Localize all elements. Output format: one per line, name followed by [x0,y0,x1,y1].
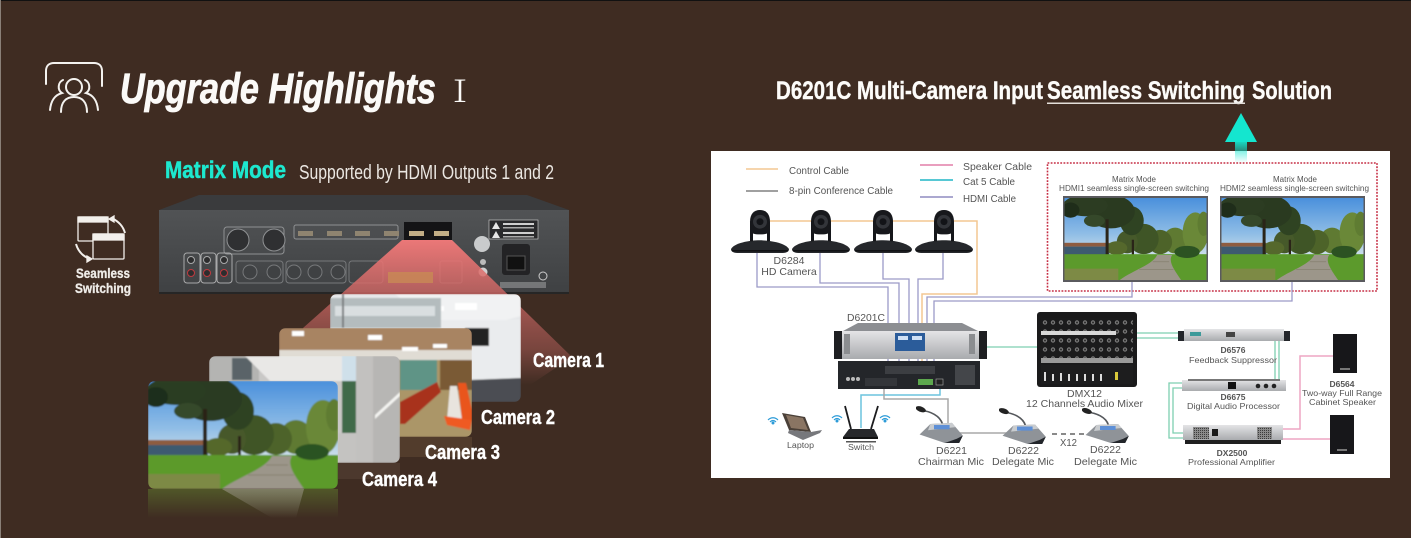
screen 1: HDMI1 seamless single-screen switching [1059,184,1209,193]
label: X12: X12 [1060,438,1077,449]
photo: camera 3 corridor [209,356,400,463]
audio mixer DMX12 [1026,312,1143,410]
RCA connectors [184,253,232,283]
icon: seamless switching [76,216,125,262]
device rear panel [159,195,569,294]
arrow: up to heading [1225,113,1257,163]
subheading: matrix mode [165,157,554,184]
photo: camera 4 park [144,377,342,489]
title: Ⅰ [445,67,475,111]
photo: camera 1 office [330,294,521,402]
laptop [768,413,822,450]
digital audio processor D6675: D6675 [1220,392,1246,402]
heading: solution title: Solution [1252,77,1332,105]
reflection: camera 2 [400,437,472,457]
label: camera 4: Camera 4 [362,469,438,491]
subheading: matrix mode: Supported by HDMI Outputs 1 and 2 [299,162,554,184]
delegate mic D6222 [992,407,1054,468]
photo: camera 2 conference room [279,328,472,437]
amplifier DX2500 [1183,425,1283,467]
speakers D6564: Cabinet Speaker [1309,397,1376,407]
audio mixer DMX12: DMX12 [1067,388,1102,400]
cables [757,221,1333,439]
legend [746,162,1032,205]
label: D6284: HD Camera [761,266,817,278]
label: seamless switching [75,265,131,296]
legend: Speaker Cable [963,162,1032,173]
screen 1: Matrix Mode [1112,175,1157,184]
legend: 8-pin Conference Cable [789,186,893,197]
feedback suppressor D6576: Feedback Suppressor [1189,355,1277,365]
screen 2: Matrix Mode [1273,175,1318,184]
laptop: Laptop [787,441,815,450]
legend: Control Cable [789,166,849,177]
heading: solution title: D6201C Multi-Camera Input [776,77,1044,105]
balance out connectors [224,227,285,254]
main unit D6201C: D6201C [847,312,885,324]
digital audio processor D6675: Digital Audio Processor [1187,401,1280,411]
speakers D6564: D6564 [1329,379,1355,389]
heading: solution title [776,77,1332,105]
HDMI input ports [294,225,399,239]
main unit D6201C [834,312,987,389]
label: camera 2: Camera 2 [481,407,555,429]
red projection beam [303,240,572,385]
network switch: Switch [848,443,874,452]
matrix mode dotted frame [1048,163,1377,291]
icon: meeting group [46,63,102,112]
delegate mic D6222: Delegate Mic [992,456,1054,468]
conference ports [236,261,462,283]
delegate mic D6222 second: D6222 [1090,444,1121,456]
HDMI output ports [404,222,452,240]
screen 1 [1059,175,1209,282]
screen 2: HDMI2 seamless single-screen switching [1220,184,1369,193]
feedback suppressor D6576: D6576 [1220,345,1246,355]
reflection: camera 4 [148,489,338,518]
label: camera 3: Camera 3 [425,442,500,464]
caution label [489,220,538,239]
label: camera 1: Camera 1 [533,350,604,372]
digital audio processor D6675 [1182,379,1286,411]
terminal block under beam [388,272,433,283]
amplifier DX2500: Professional Amplifier [1188,457,1275,467]
speakers D6564 [1302,334,1382,454]
subheading: matrix mode: Matrix Mode [165,157,286,184]
chairman mic D6221: D6221 [936,445,967,457]
audio mixer DMX12: 12 Channels Audio Mixer [1026,398,1143,410]
title: Upgrade Highlights [120,65,436,113]
delegate mic D6222 second: Delegate Mic [1074,456,1137,468]
reflection: camera 3 [338,463,400,479]
power socket [474,236,547,288]
panel: wiring diagram [711,151,1390,478]
chairman mic D6221 [915,405,984,468]
speakers D6564: Two-way Full Range [1302,388,1382,398]
amplifier DX2500: DX2500 [1217,448,1248,458]
label: seamless switching: Seamless [76,265,130,281]
delegate mic D6222 second [1074,407,1137,468]
heading: solution title: Seamless Switching [1047,77,1245,105]
screen 2 [1219,175,1369,282]
label: D6284 [761,255,817,278]
label: seamless switching: Switching [75,280,131,296]
chairman mic D6221: Chairman Mic [918,456,984,468]
cameras [731,210,973,253]
legend: HDMI Cable [963,194,1016,205]
legend: Cat 5 Cable [963,177,1015,188]
label: D6284: D6284 [774,255,805,267]
delegate mic D6222: D6222 [1008,445,1039,457]
network switch [832,406,890,452]
feedback suppressor D6576 [1178,329,1290,365]
